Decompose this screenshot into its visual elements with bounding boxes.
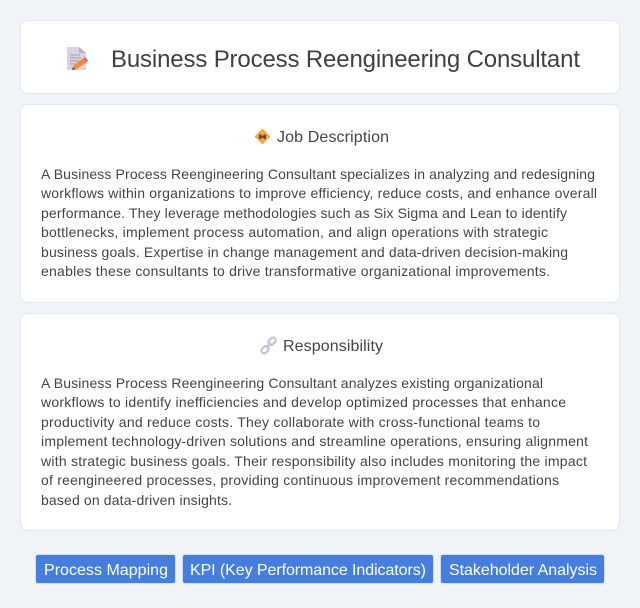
tag: stakeholder analysis: Stakeholder Analysis [449, 562, 597, 579]
text block: responsibility: with strategic business goals. Their responsibility also includes monitoring the impact [40, 453, 587, 469]
icon: orange diamond [254, 128, 270, 144]
tag: process mapping [35, 554, 176, 584]
text block: responsibility: of reengineered processes, providing continuous improvement recommendations [41, 472, 559, 488]
text block: responsibility: A Business Process Reengineering Consultant analyzes existing organizational [41, 375, 543, 391]
text block: job description [40, 166, 597, 279]
text block: responsibility: workflows to identify inefficiencies and develop optimized processes that enhance [40, 394, 566, 410]
text block: job description: business goals. Expertise in change management and data-driven decision-making [41, 244, 568, 260]
panel: title header [20, 20, 620, 94]
text block: job description: enables these consultants to drive transformative organizational improvements. [41, 263, 550, 279]
panel: job description [20, 104, 620, 303]
icon: chain link [260, 336, 277, 354]
text block: responsibility [40, 375, 588, 508]
tag: stakeholder analysis [440, 554, 605, 584]
text block: responsibility: based on data-driven insights. [41, 492, 232, 508]
text block: job description: workflows within organizations to improve efficiency, reduce costs, and enhance overall [40, 185, 597, 201]
tag: KPI: KPI (Key Performance Indicators) [190, 562, 426, 579]
text block: job description: A Business Process Reengineering Consultant specializes in analyzing and redesigning [41, 166, 595, 182]
title: Business Process Reengineering Consultant [111, 46, 580, 73]
tag: KPI [182, 554, 434, 584]
panel: responsibility [20, 313, 620, 531]
heading: job description: Job Description [277, 129, 389, 146]
tag: process mapping: Process Mapping [44, 562, 168, 579]
text block: job description: performance. They leverage methodologies such as Six Sigma and Lean to identify [41, 205, 567, 221]
heading: responsibility: Responsibility [283, 338, 383, 355]
text block: responsibility: productivity and reduce costs. They collaborate with cross-functional teams to [41, 414, 540, 430]
text block: job description: bottlenecks, implement process automation, and align operations with strategic [41, 224, 548, 240]
text block: responsibility: implement technology-driven solutions and streamline operations, ensuring alignment [41, 433, 588, 449]
icon: document with pencil [67, 47, 88, 70]
